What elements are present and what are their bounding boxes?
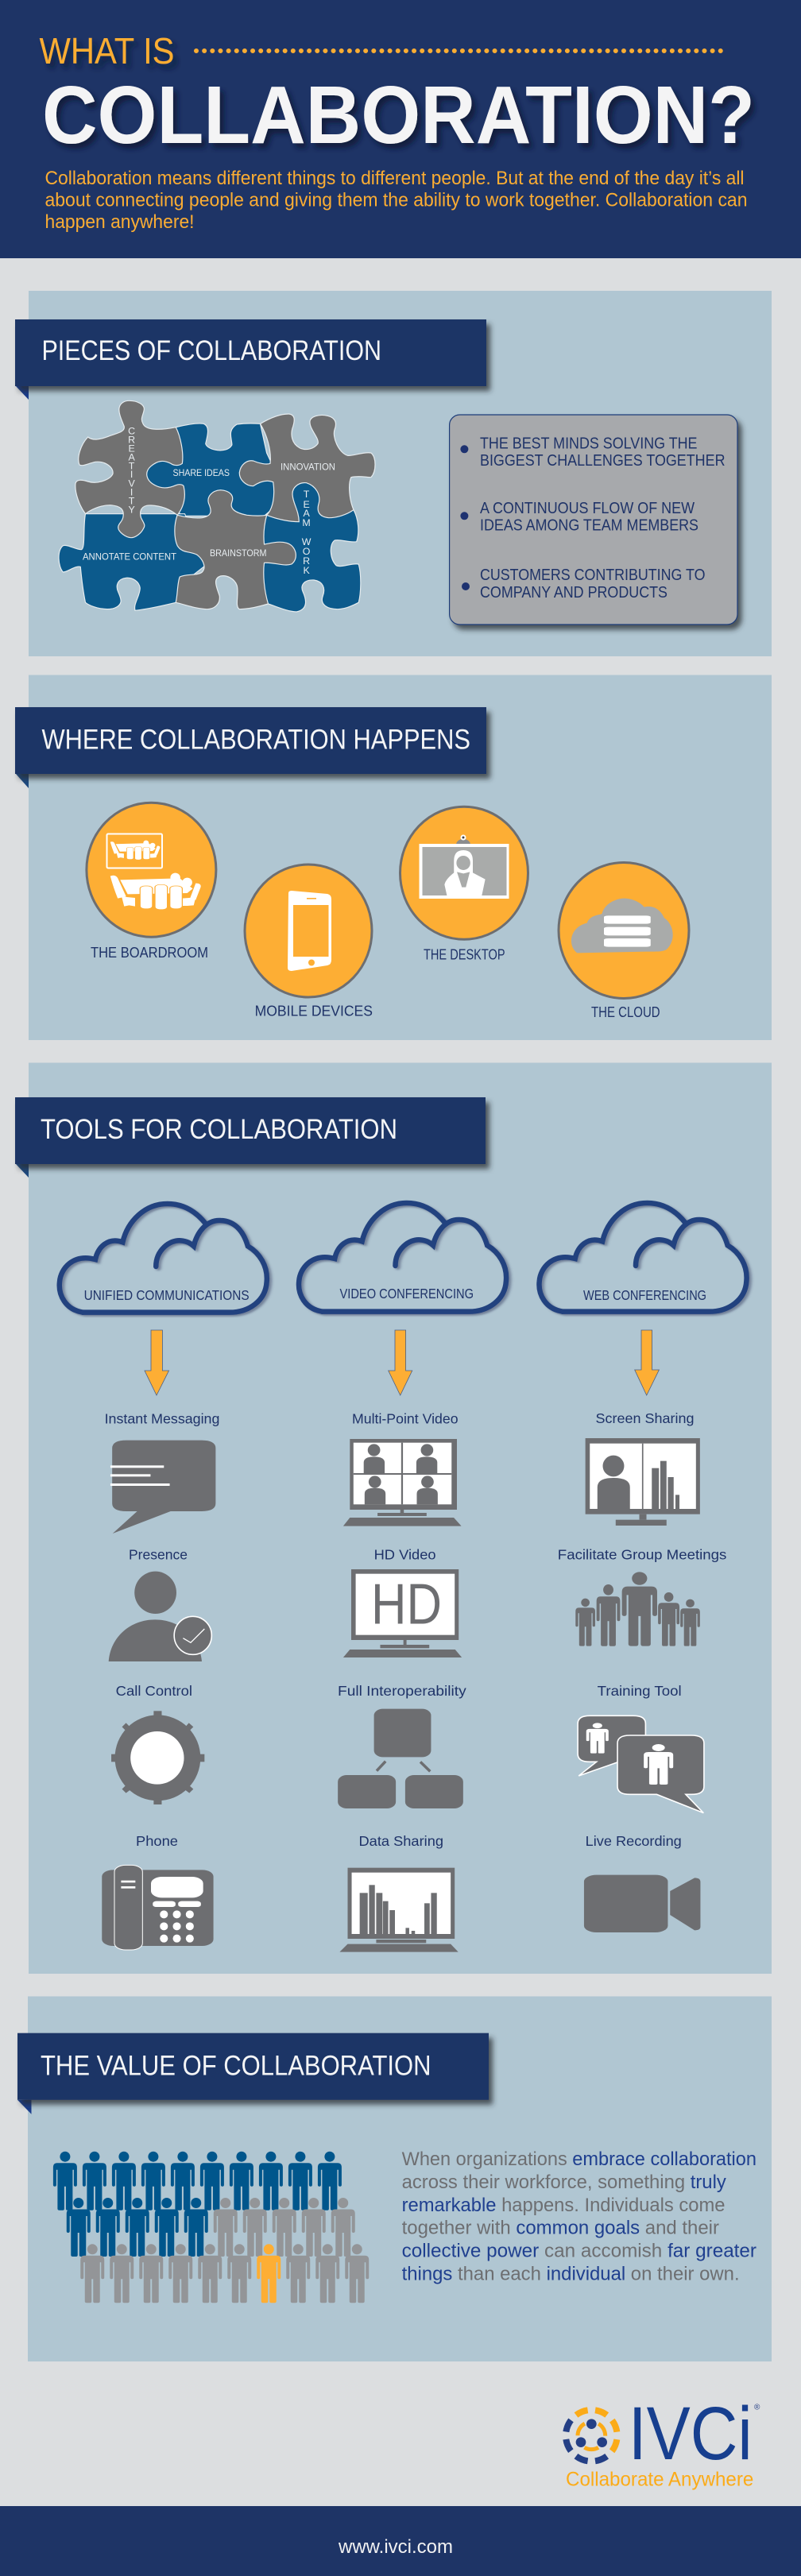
- arrow 3: [635, 1330, 659, 1395]
- logo wordmark: IVCi: [629, 2392, 753, 2476]
- value text: together with common goals and their: [402, 2218, 719, 2239]
- tool: call control: [111, 1683, 204, 1804]
- cloud: unified communications: UNIFIED COMMUNICATIONS: [84, 1287, 250, 1303]
- footer: www.ivci.com: [338, 2536, 453, 2558]
- icon: cloud: THE CLOUD: [591, 1004, 660, 1020]
- value text: across their workforce, something truly: [402, 2172, 726, 2193]
- tool: full interoperability: [338, 1683, 466, 1808]
- value text: things than each individual on their own.: [402, 2263, 740, 2284]
- row 1: blue people: [53, 2152, 342, 2210]
- section banner: [17, 2033, 489, 2100]
- icon: mobile devices: [245, 864, 373, 1019]
- puzzle labels: SHARE IDEAS: [173, 467, 230, 478]
- value text: collective power can accomish far greater: [402, 2241, 756, 2262]
- arrow 2: [389, 1330, 412, 1395]
- blue piece: annotate content: [59, 514, 207, 610]
- tool: hd video: HD: [371, 1572, 442, 1636]
- callout box: THE BEST MINDS SOLVING THE: [480, 435, 698, 452]
- blue piece: share ideas: [140, 424, 279, 516]
- icon: boardroom: THE BOARDROOM: [91, 944, 208, 961]
- section banner: TOOLS FOR COLLABORATION: [41, 1114, 397, 1145]
- section banner: WHERE COLLABORATION HAPPENS: [41, 725, 470, 756]
- tool: phone: [102, 1833, 214, 1950]
- callout box: IDEAS AMONG TEAM MEMBERS: [480, 517, 698, 535]
- tagline: Collaborate Anywhere: [566, 2468, 753, 2490]
- panel: where collaboration happens: [15, 675, 772, 1040]
- section banner: [15, 1097, 486, 1164]
- gray piece: creativity: [75, 400, 184, 538]
- tool: facilitate group meetings: Facilitate Group Meetings: [558, 1547, 727, 1563]
- puzzle graphic: [59, 400, 375, 612]
- value text: remarkable happens. Individuals come: [402, 2195, 725, 2216]
- puzzle labels: TEAM: [302, 489, 311, 528]
- icon: mobile devices: MOBILE DEVICES: [255, 1003, 373, 1019]
- intro text: Collaboration means different things to different people. But at the end of the day it’s all: [44, 168, 744, 189]
- ribbon fold: [16, 1164, 29, 1178]
- tool: facilitate group meetings: [558, 1547, 727, 1646]
- tool: full interoperability: Full Interoperability: [338, 1683, 466, 1699]
- gray piece: brainstorm: [175, 490, 296, 609]
- section banner: [15, 319, 486, 386]
- tool: hd video: [343, 1547, 462, 1657]
- icon: desktop: THE DESKTOP: [424, 946, 505, 963]
- intro text: happen anywhere!: [44, 211, 194, 233]
- tool: hd video: HD Video: [374, 1547, 436, 1563]
- tool: instant messaging: [105, 1411, 219, 1534]
- arrow 1: [145, 1330, 168, 1395]
- ribbon fold: [17, 2100, 32, 2114]
- puzzle labels: BRAINSTORM: [210, 547, 267, 559]
- section banner: [15, 707, 486, 774]
- puzzle labels: [83, 426, 335, 576]
- footer: [0, 2506, 801, 2576]
- icon: cloud: [559, 863, 689, 1020]
- puzzle labels: WORK: [302, 536, 312, 576]
- logo mark: [555, 2400, 628, 2472]
- gray piece: innovation: [239, 414, 375, 522]
- blue piece: team work: [254, 479, 361, 612]
- tool: presence: [109, 1547, 211, 1661]
- panel: the value of collaboration: [17, 1996, 772, 2361]
- callout box: CUSTOMERS CONTRIBUTING TO: [480, 567, 706, 584]
- tool: screen sharing: [586, 1410, 700, 1526]
- section banner: PIECES OF COLLABORATION: [41, 335, 381, 366]
- section banner: THE VALUE OF COLLABORATION: [41, 2051, 431, 2082]
- puzzle labels: CREATIVITY: [128, 426, 135, 515]
- tool: training tool: [578, 1683, 704, 1813]
- cloud: unified communications: [60, 1204, 267, 1313]
- registered mark: ®: [754, 2403, 760, 2412]
- heading: what is: WHAT IS: [40, 30, 175, 72]
- icon: desktop: [400, 806, 528, 963]
- cloud: web conferencing: WEB CONFERENCING: [583, 1287, 706, 1303]
- cloud: video conferencing: [299, 1203, 506, 1312]
- tool: training tool: Training Tool: [598, 1683, 682, 1699]
- ribbon fold: [16, 774, 29, 788]
- tool: data sharing: [339, 1833, 459, 1952]
- header: [0, 0, 801, 258]
- puzzle labels: ANNOTATE CONTENT: [83, 551, 177, 563]
- title: COLLABORATION?: [42, 69, 755, 161]
- tool: data sharing: Data Sharing: [359, 1833, 443, 1849]
- panel: pieces of collaboration: [15, 291, 772, 656]
- callout box: [450, 415, 737, 625]
- tool: presence: Presence: [129, 1547, 188, 1563]
- row 3: gray people and one orange: [80, 2244, 369, 2303]
- tool: call control: Call Control: [116, 1683, 192, 1699]
- row 2: blue and gray people: [67, 2198, 355, 2257]
- tool: instant messaging: Instant Messaging: [105, 1411, 219, 1427]
- icon: boardroom: [87, 803, 216, 961]
- callout box: BIGGEST CHALLENGES TOGETHER: [480, 452, 725, 470]
- tool: screen sharing: Screen Sharing: [596, 1410, 695, 1426]
- tool: phone: Phone: [136, 1833, 178, 1849]
- callout box: A CONTINUOUS FLOW OF NEW: [480, 500, 695, 517]
- cloud: web conferencing: [540, 1203, 747, 1312]
- value text: [402, 2149, 756, 2284]
- panel: tools for collaboration: [15, 1063, 772, 1974]
- puzzle labels: INNOVATION: [281, 462, 335, 473]
- cloud: video conferencing: VIDEO CONFERENCING: [340, 1286, 474, 1302]
- people graphic: [53, 2152, 369, 2303]
- intro text: [44, 168, 747, 233]
- ribbon fold: [16, 386, 29, 400]
- logo: IVCi: [555, 2392, 760, 2490]
- callout box: COMPANY AND PRODUCTS: [480, 584, 668, 601]
- tool: multi-point video: [343, 1411, 462, 1526]
- tool: live recording: Live Recording: [586, 1833, 682, 1849]
- dotted rule: [196, 48, 721, 53]
- tool: multi-point video: Multi-Point Video: [352, 1411, 459, 1427]
- tool: live recording: [584, 1833, 700, 1932]
- intro text: about connecting people and giving them the ability to work together. Collaboration can: [44, 189, 747, 211]
- value text: When organizations embrace collaboration: [402, 2149, 756, 2170]
